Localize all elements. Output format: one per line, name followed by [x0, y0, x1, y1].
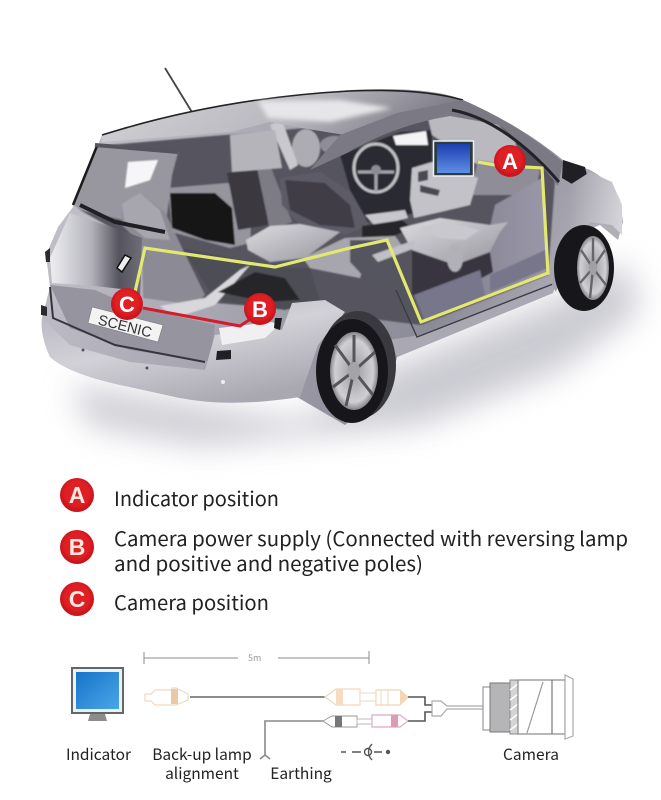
side windows light [270, 120, 298, 170]
legend item B: Camera power supply (Connected with reversing lamp [114, 523, 628, 552]
wing mirror [562, 160, 588, 184]
label: Earthing: Earthing [270, 762, 332, 784]
cockpit [340, 130, 432, 222]
cabin interior [73, 108, 555, 325]
ground shadow [70, 262, 640, 445]
car body silhouette [42, 90, 623, 425]
back-up lamp cable [145, 688, 408, 705]
legend item B: and positive and negative poles) [114, 548, 423, 577]
length dimension 5m [144, 651, 369, 664]
rear wheel [316, 311, 396, 423]
sill below door [388, 283, 553, 357]
marker C [111, 288, 143, 320]
licence plate: SCENIC [96, 313, 153, 341]
a-pillar and windscreen frame [310, 100, 563, 186]
legend [60, 478, 628, 616]
rear door lower [350, 240, 418, 318]
splitter wires [408, 697, 483, 721]
tailgate [50, 213, 142, 300]
label: Back-up lamp alignment: Back-up lamp [152, 743, 252, 765]
tail light [219, 322, 279, 345]
front wheel [554, 225, 614, 311]
legend item C: C [69, 586, 85, 612]
wiring diagram [66, 651, 573, 784]
legend item A [60, 478, 279, 512]
middle seat back and headrest [280, 172, 368, 235]
red wire [143, 308, 252, 326]
legend item B [60, 523, 628, 577]
indicator screen [434, 141, 474, 176]
antenna [165, 68, 206, 133]
folded seat with black back [168, 183, 252, 248]
lower rear quarter and bumper [42, 300, 345, 403]
right door panel [410, 178, 548, 322]
door pocket strips [414, 270, 485, 322]
second cushion [303, 236, 405, 278]
polarity symbol [341, 744, 390, 760]
label: Back-up lamp alignment [152, 743, 252, 784]
camera [483, 675, 573, 739]
earthing cable [260, 716, 372, 759]
marker B: B [252, 297, 268, 322]
marker C: C [119, 292, 135, 317]
label: Indicator: Indicator [66, 743, 132, 765]
label: Camera: Camera [503, 743, 559, 765]
folded rear cushion [246, 224, 340, 262]
front seat [400, 218, 508, 265]
trunk floor [182, 248, 320, 310]
front wing [552, 172, 622, 292]
pink connector [372, 715, 408, 727]
legend item C: Camera position [114, 587, 269, 616]
licence plate [88, 307, 163, 342]
marker B [244, 293, 276, 325]
length dimension 5m: 5m [248, 651, 261, 664]
roof [102, 89, 463, 142]
indicator monitor icon [72, 668, 123, 721]
marker A: A [502, 149, 518, 174]
legend item B: B [69, 534, 85, 560]
logo emblem [117, 255, 131, 272]
legend item A: Indicator position [114, 483, 279, 512]
interior base [80, 108, 555, 325]
yellow wire [135, 162, 548, 322]
centre console [410, 162, 478, 218]
legend item A: A [69, 482, 85, 508]
marker A [494, 145, 526, 177]
rear seat area [73, 146, 178, 230]
car illustration with wiring [41, 68, 640, 445]
legend item C [60, 582, 269, 616]
label: Back-up lamp alignment: alignment [165, 762, 239, 784]
